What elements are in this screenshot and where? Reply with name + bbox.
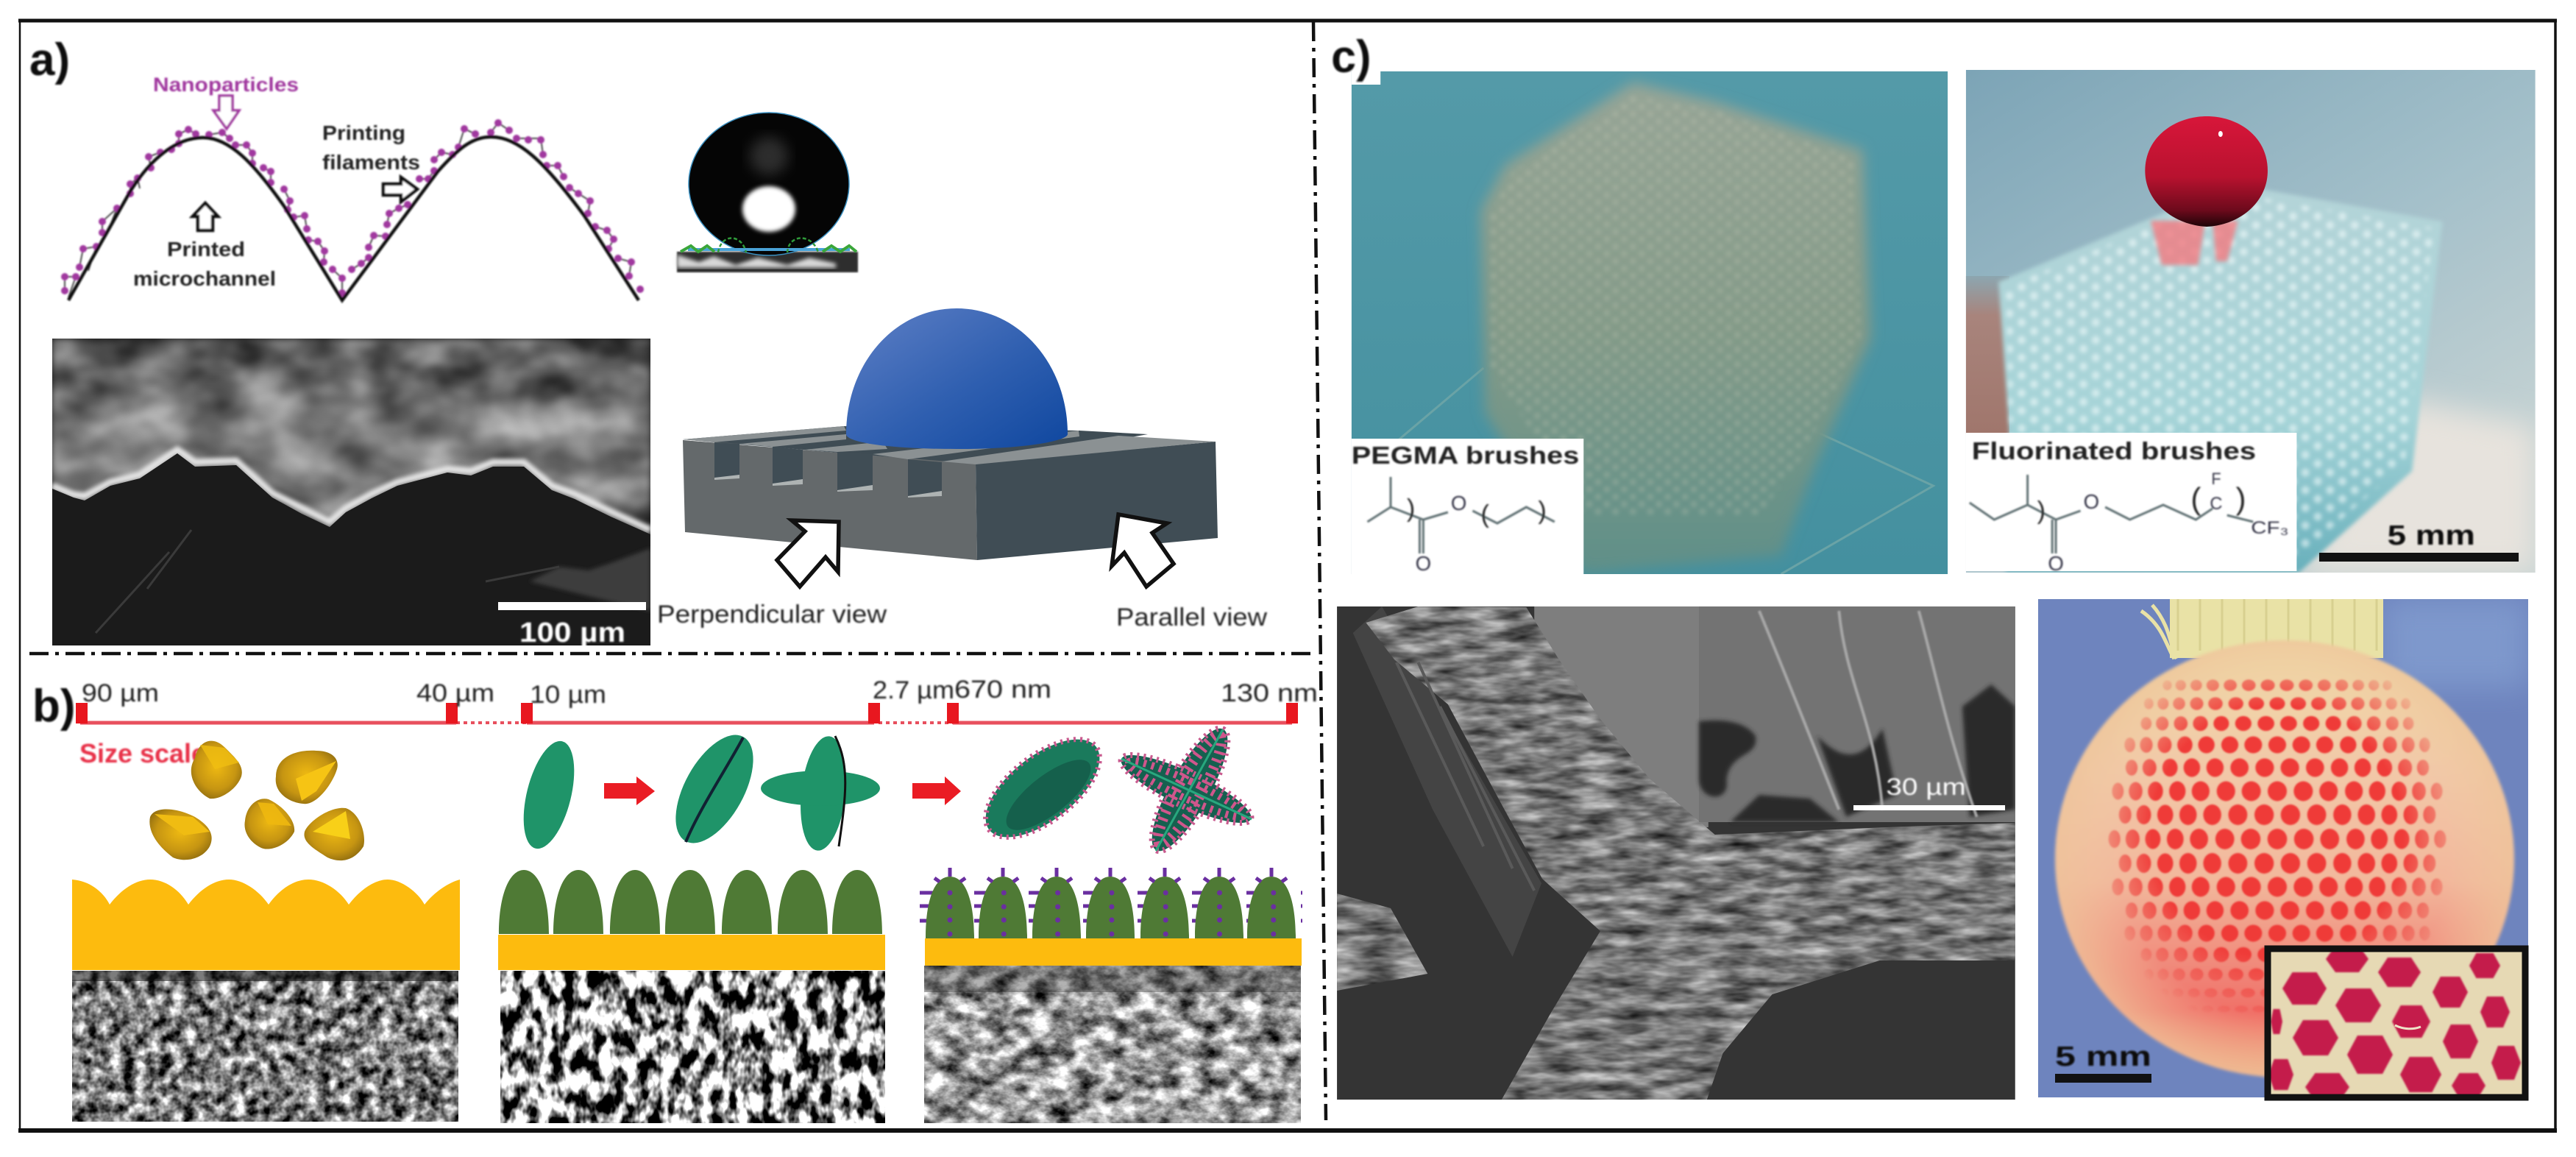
3D grooved block with blue droplet bbox=[657, 308, 1267, 631]
photo: contact angle droplet bbox=[677, 113, 858, 272]
chemical structure: fluorinated: F bbox=[2211, 470, 2221, 488]
chemical structure: fluorinated: O bbox=[2048, 552, 2064, 575]
photo: fluorinated lattice with red droplet bbox=[1966, 70, 2536, 573]
heading b): b) bbox=[32, 681, 76, 732]
groove openings bbox=[714, 442, 942, 496]
label: size scale: Size scale bbox=[79, 738, 206, 768]
label box: fluorinated brushes: Fluorinated brushes bbox=[1972, 437, 2256, 464]
chemical structure: PEGMA bbox=[1367, 477, 1555, 575]
heading a): a) bbox=[29, 35, 70, 85]
scale bar 100 um: 100 µm bbox=[519, 618, 625, 648]
arrow: filaments bbox=[383, 177, 417, 202]
label: parallel view: Parallel view bbox=[1116, 604, 1267, 631]
scale bar 30 um bbox=[1853, 774, 2005, 810]
red droplet bbox=[2145, 116, 2268, 227]
label: printing filaments: Printing bbox=[322, 121, 405, 144]
chemical structure: fluorinated: C bbox=[2210, 494, 2223, 514]
scale bar 100 um bbox=[498, 602, 646, 648]
arrow: parallel view bbox=[1112, 514, 1174, 587]
photo: SEM of printed branch bbox=[1337, 606, 2015, 1100]
decorated pillars on gold bbox=[920, 868, 1302, 966]
label: perpendicular view: Perpendicular view bbox=[657, 601, 887, 629]
chemical structure: fluorinated: ) bbox=[2037, 497, 2045, 525]
size scale ruler: 90 µm bbox=[82, 679, 159, 707]
label box: fluorinated brushes bbox=[1966, 433, 2296, 575]
dash-dot dividers bbox=[29, 22, 1326, 1120]
size scale ruler: 40 µm bbox=[416, 679, 494, 707]
photo: PEGMA lattice cube bbox=[1352, 71, 1948, 574]
panel c bbox=[1331, 32, 2536, 1101]
chemical structure: fluorinated: ( bbox=[2190, 481, 2201, 516]
photo: printed sphere lattice bbox=[2038, 599, 2528, 1097]
size scale ruler: 2.7 µm bbox=[873, 676, 954, 704]
chemical structure: PEGMA: O bbox=[1451, 492, 1466, 514]
green ellipse sequence bbox=[514, 720, 1258, 860]
diagram: printed microchannel with nanoparticles: microchannel bbox=[133, 267, 276, 290]
panel b bbox=[32, 676, 1318, 1123]
gold scalloped surface bbox=[72, 880, 460, 970]
label box: PEGMA brushes bbox=[1352, 439, 1583, 575]
chemical structure: fluorinated: O bbox=[2084, 490, 2099, 513]
panel a bbox=[29, 35, 1267, 648]
size scale ruler bbox=[76, 676, 1318, 723]
scale bar 5 mm (sphere photo): 5 mm bbox=[2055, 1041, 2151, 1072]
chemical structure: fluorinated: ) bbox=[2236, 481, 2246, 516]
inset: hexagonal holes close-up bbox=[2265, 946, 2528, 1101]
photo: SEM nanoplates bbox=[500, 971, 885, 1123]
diagram: printed microchannel with nanoparticles: filaments bbox=[322, 151, 420, 174]
diagram: printed microchannel with nanoparticles bbox=[65, 74, 640, 300]
photo: SEM microparticles bbox=[72, 971, 458, 1122]
size scale ruler: 130 nm bbox=[1221, 679, 1318, 707]
photo: SEM cross section bbox=[52, 339, 650, 648]
chemical structure: PEGMA: ) bbox=[1407, 495, 1415, 523]
chemical structure: fluorinated bbox=[1970, 470, 2289, 575]
size scale ruler: 10 µm bbox=[530, 681, 606, 709]
gold microparticles bbox=[149, 741, 364, 860]
scale bar 5 mm (sphere photo) bbox=[2055, 1041, 2151, 1083]
chemical structure: PEGMA: ) bbox=[1538, 497, 1547, 525]
arrow: perpendicular view bbox=[777, 520, 839, 587]
inset SEM bbox=[1699, 606, 2015, 822]
chemical structure: PEGMA: O bbox=[1416, 552, 1431, 575]
chemical structure: PEGMA: ( bbox=[1481, 500, 1489, 528]
heading c): c) bbox=[1331, 32, 1371, 82]
scale bar 5 mm (fluorinated photo): 5 mm bbox=[2388, 520, 2475, 551]
arrow: nanoparticles bbox=[213, 96, 239, 129]
arrow: microchannel bbox=[193, 203, 218, 230]
droplet bbox=[846, 308, 1068, 449]
label: printed microchannel: Printed bbox=[167, 238, 245, 261]
sphere body bbox=[2055, 640, 2514, 1078]
label: nanoparticles: Nanoparticles bbox=[153, 74, 299, 96]
scale bar 5 mm (fluorinated photo) bbox=[2319, 520, 2519, 562]
hexagonal holes bbox=[2109, 679, 2446, 1012]
chemical structure: fluorinated: CF₃ bbox=[2251, 518, 2289, 538]
photo: SEM hierarchical flakes bbox=[924, 966, 1301, 1123]
label box: PEGMA brushes: PEGMA brushes bbox=[1352, 442, 1579, 469]
scale bar 30 um: 30 µm bbox=[1886, 774, 1966, 800]
green pillars on gold bbox=[498, 870, 885, 970]
size scale ruler: 670 nm bbox=[954, 676, 1051, 704]
